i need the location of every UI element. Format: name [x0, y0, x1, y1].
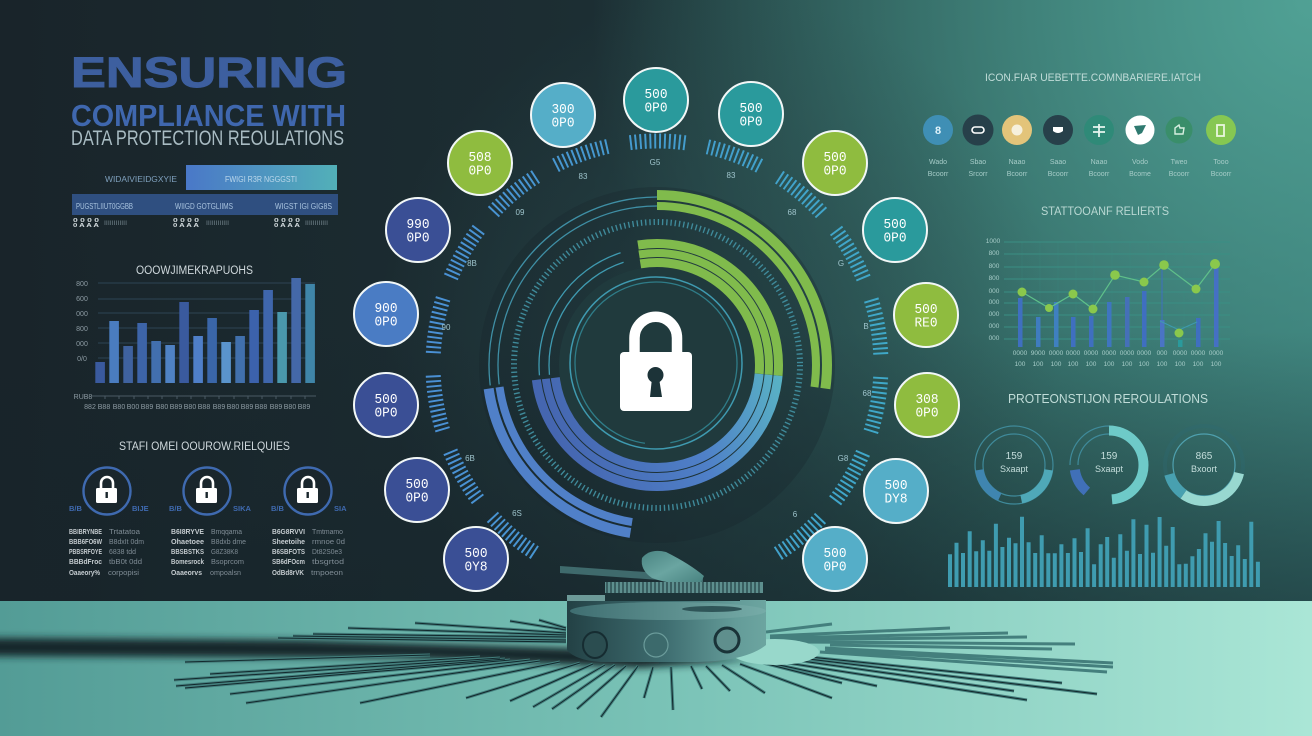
- panel: lock column 3: SIA: [334, 504, 347, 513]
- small tick labels: 09: [516, 208, 525, 217]
- bar chart: B89: [213, 404, 225, 411]
- panel: lock column 1: BBIBRYNBE: [69, 529, 102, 536]
- bar chart: B88: [198, 404, 210, 411]
- value circle 7: [895, 373, 959, 437]
- icon row labels: Bcoorr: [1211, 171, 1232, 178]
- icon row labels: Bcome: [1129, 171, 1151, 178]
- combo bar and line chart: 800: [989, 263, 1000, 270]
- combo bar and line chart: 0000: [1120, 350, 1135, 357]
- combo bar and line chart: 9000: [1031, 350, 1046, 357]
- panel: status table: WIIGD GOTGLIIMS: [175, 202, 233, 211]
- panel: lock column 1: tbB0t 0dd: [109, 559, 142, 566]
- panel: lock column 1: [69, 468, 149, 577]
- donut 3: Bxoort: [1191, 464, 1218, 474]
- panel: lock column 3: Sheetoihe: [272, 539, 305, 546]
- bar chart: 000: [76, 341, 88, 348]
- panel: lock column 1: Oaaeory%: [69, 570, 101, 577]
- value circle 4: 0P0: [824, 164, 846, 180]
- panel: lock column 3: OdBd8rVK: [272, 570, 304, 577]
- value circle 13: [354, 282, 418, 346]
- panel: lock column 2: Bomesrock: [171, 559, 204, 566]
- bar chart: B00: [127, 404, 139, 411]
- icon row labels: [928, 159, 1232, 178]
- value circle 14: [386, 198, 450, 262]
- panel: lock column 3: B/B: [271, 504, 284, 513]
- heading: combo chart: STATTOOANF RELIERTS: [1041, 204, 1169, 218]
- combo bar and line chart: 000: [989, 335, 1000, 342]
- combo bar and line chart: 100: [1193, 361, 1204, 368]
- bar chart: B89: [270, 404, 282, 411]
- value circle 6: RE0: [914, 316, 938, 332]
- panel: status table: WIDAIVIEIDGXYIE: [105, 174, 177, 184]
- icon row labels: Bcoorr: [1048, 171, 1069, 178]
- value circle 4: 500: [824, 150, 846, 166]
- bar chart: B88: [98, 404, 110, 411]
- combo bar and line chart: 100: [1033, 361, 1044, 368]
- icon row labels: Saao: [1050, 159, 1066, 166]
- small tick labels: G: [838, 259, 844, 268]
- panel: status table: 0 0 0 0: [173, 218, 199, 224]
- value circle 10: 500: [464, 546, 488, 562]
- panel: lock column 1: PBBSRFOYE: [69, 549, 102, 556]
- small tick labels: 68: [788, 208, 797, 217]
- outer blue arcs: [462, 170, 852, 560]
- value circle 13: 0P0: [374, 314, 398, 330]
- panel: lock column 3: Dt82S0e3: [312, 549, 342, 556]
- dotted tick ring: [514, 222, 800, 508]
- value circle 7: 0P0: [916, 406, 938, 422]
- small tick labels: 90: [442, 323, 451, 332]
- value circle 15: 508: [468, 150, 492, 166]
- value circle 9: 0P0: [824, 560, 846, 576]
- panel: lock column 1: corpopisi: [108, 570, 139, 577]
- value circle 7: 308: [916, 392, 938, 408]
- bar chart: B89: [241, 404, 253, 411]
- value circle 1: 0P0: [552, 116, 574, 132]
- value circle 14: 0P0: [406, 230, 430, 246]
- small tick labels: B: [863, 322, 869, 331]
- inner green arcs: [518, 226, 796, 504]
- floor shadow: [0, 638, 760, 668]
- panel: lock column 3: tbsgrtod: [312, 559, 344, 566]
- gauge backdrop disc: [479, 187, 835, 543]
- value circle 2: 0P0: [644, 100, 668, 116]
- icon 7: [1166, 116, 1192, 144]
- panel: lock column 1: BBBdFroc: [69, 559, 102, 566]
- combo bar and line chart: 000: [1157, 350, 1168, 357]
- combo bar and line chart: 100: [1015, 361, 1026, 368]
- combo bar and line chart: 000: [989, 323, 1000, 330]
- bar chart: 0/0: [77, 356, 87, 363]
- value circle 3: 500: [740, 101, 762, 117]
- panel: lock column 2: Ohaetoee: [171, 539, 204, 546]
- bar chart: B89: [298, 404, 310, 411]
- value circle 15: [448, 131, 512, 195]
- central radial gauge: [462, 170, 852, 560]
- bar chart: 600: [76, 296, 88, 303]
- panel: lock column 1: Trtatatoa: [109, 529, 140, 536]
- heading: left bar chart: OOOWJIMEKRAPUOHS: [136, 265, 253, 277]
- icon row labels: Naao: [1009, 159, 1025, 166]
- device on the floor: [560, 551, 819, 665]
- panel: status table: [72, 165, 338, 229]
- small tick labels: G8: [838, 454, 849, 463]
- panel: lock column 2: B8dxb dme: [211, 539, 246, 546]
- heading: donut section: PROTEONSTIJON REROULATIONS: [1008, 392, 1208, 406]
- combo bar and line chart: 0000: [1173, 350, 1188, 357]
- combo bar and line chart: 0000: [1066, 350, 1081, 357]
- combo bar and line chart: 000: [989, 288, 1000, 295]
- small tick labels: 83: [579, 172, 588, 181]
- panel: lock column 3: rmnoe 0d: [312, 539, 345, 546]
- panel: lock column 2: ompoalsn: [210, 570, 241, 577]
- inner teal to blue arcs: [536, 244, 778, 486]
- combo bar and line chart: 000: [989, 299, 1000, 306]
- radial floor rays: [174, 620, 1113, 717]
- combo bar and line chart: 000: [989, 311, 1000, 318]
- value circle 11: 0P0: [406, 490, 428, 506]
- panel: lock column 1: BBB6FO6W: [69, 539, 102, 546]
- panel: status table: FWIGI R3R NGGGSTI: [225, 174, 297, 184]
- icon 6: [1126, 116, 1154, 144]
- panel: lock column 2: B/B: [169, 504, 182, 513]
- heading: icon row: ICON.FIAR UEBETTE.COMNBARIERE.IATCH: [985, 72, 1201, 84]
- value circle 11: 500: [406, 477, 428, 493]
- panel: lock column 2: Bsoprcom: [211, 559, 244, 566]
- panel: lock column 3: B6G8RVVI: [272, 529, 305, 536]
- thin outer arcs: [470, 178, 844, 552]
- panel: status table: 0 0 0 0: [274, 218, 300, 224]
- value circle 1: 300: [552, 102, 574, 118]
- bar chart: B80: [284, 404, 296, 411]
- value circle 8: [864, 459, 928, 523]
- icon row labels: Srcorr: [968, 171, 988, 178]
- panel: lock column 2: B6I8RYVE: [171, 529, 204, 536]
- combo bar and line chart: 100: [1139, 361, 1150, 368]
- combo bar and line chart: 100: [1051, 361, 1062, 368]
- icon row labels: Bcoorr: [1007, 171, 1028, 178]
- icon 4: [1043, 115, 1073, 145]
- small tick labels: 8B: [467, 259, 477, 268]
- panel: status table: PUGSTLIIUT0GGBB: [76, 202, 133, 211]
- panel: lock column 1: BIJE: [132, 504, 149, 513]
- value circle 8: 500: [884, 478, 908, 494]
- panel: status table: 0 A A A: [173, 223, 200, 229]
- donut 3: 865: [1196, 451, 1213, 462]
- small tick labels: 6S: [512, 509, 522, 518]
- donut 2: 159: [1101, 451, 1118, 462]
- combo bar and line chart: 100: [1086, 361, 1097, 368]
- panel: lock column 3: tmpoeon: [311, 570, 343, 577]
- panel: status table: IIIIIIIIIIII: [206, 221, 229, 227]
- icon 3: [1002, 115, 1032, 145]
- value circle 3: 0P0: [740, 114, 762, 130]
- small tick labels: 83: [727, 171, 736, 180]
- panel: status table: 0 0 0 0: [73, 218, 99, 224]
- icon 8: [1206, 115, 1236, 145]
- value circle 6: [894, 283, 958, 347]
- combo bar and line chart: [986, 238, 1230, 368]
- value circle 5: 500: [884, 217, 906, 233]
- combo bar and line chart: 0000: [1137, 350, 1152, 357]
- donut 1: Sxaapt: [1000, 464, 1029, 474]
- value circle 1: [531, 83, 595, 147]
- bar chart: [74, 278, 316, 411]
- panel: status table: WIGST IGI GIG8S: [275, 202, 332, 211]
- value circle 3: [719, 82, 783, 146]
- title: COMPLIANCE WITH: [71, 98, 346, 133]
- value circle 9: 500: [824, 546, 846, 562]
- value circle 9: [803, 527, 867, 591]
- small tick labels: 6B: [465, 454, 475, 463]
- donut 1: 159: [1006, 451, 1023, 462]
- panel: lock column 2: SIKA: [233, 504, 252, 513]
- value circle 13: 900: [374, 301, 398, 317]
- panel: lock column 2: Bmqqama: [211, 529, 242, 536]
- combo bar and line chart: 800: [989, 275, 1000, 282]
- panel: status table: IIIIIIIIIIII: [305, 221, 328, 227]
- value circle 8: DY8: [884, 492, 908, 508]
- panel: lock column 1: B8dxIt 0dm: [109, 539, 144, 546]
- value circle 6: 500: [914, 302, 938, 318]
- title: DATA PROTECTION REOULATIONS: [71, 127, 344, 150]
- combo bar and line chart: 0000: [1084, 350, 1099, 357]
- bar chart: 882: [84, 404, 96, 411]
- panel: lock column 2: BBSBSTKS: [171, 549, 204, 556]
- value circle 10: [444, 527, 508, 591]
- bar chart: B80: [184, 404, 196, 411]
- panel: lock column 2: G8Z38K8: [211, 549, 238, 556]
- panel: lock column 3: SB6dFOcm: [272, 559, 305, 566]
- donut 1: [968, 419, 1060, 511]
- value circle 14: 990: [406, 217, 430, 233]
- bar chart: RUB8: [74, 394, 92, 401]
- combo bar and line chart: 800: [989, 250, 1000, 257]
- panel: lock column 3: B6SBFOTS: [272, 549, 305, 556]
- tick arcs between value circles: [433, 141, 881, 589]
- title: ENSURING: [71, 49, 347, 97]
- combo bar and line chart: 100: [1122, 361, 1133, 368]
- icon row labels: Sbao: [970, 159, 986, 166]
- panel: lock column 2: [169, 468, 252, 577]
- inner disc: [559, 267, 755, 463]
- panel: status table: 0 A A A: [73, 223, 100, 229]
- combo bar and line chart: 100: [1175, 361, 1186, 368]
- small tick labels: G5: [650, 158, 661, 167]
- icon row: [923, 114, 1236, 146]
- value circle 11: [385, 458, 449, 522]
- panel: lock column 3: [271, 468, 347, 577]
- combo bar and line chart: 100: [1104, 361, 1115, 368]
- value circle 5: 0P0: [884, 230, 906, 246]
- combo bar and line chart: 0000: [1191, 350, 1206, 357]
- panel: lock column 1: B/B: [69, 504, 82, 513]
- value circle 12: 0P0: [374, 406, 398, 422]
- bar chart: B89: [170, 404, 182, 411]
- donut 2: [1060, 416, 1158, 514]
- small tick labels: 68: [863, 389, 872, 398]
- bar chart: B89: [141, 404, 153, 411]
- bar chart: B80: [156, 404, 168, 411]
- small tick labels: [442, 158, 872, 519]
- combo bar and line chart: 0000: [1013, 350, 1028, 357]
- icon 5: [1084, 115, 1114, 145]
- small tick labels: 6: [793, 510, 798, 519]
- bar chart: B80: [113, 404, 125, 411]
- bottom right bar strip: [950, 517, 1258, 587]
- value circle 12: [354, 373, 418, 437]
- heading: lock section: STAFI OMEI OOUROW.RIELQUIES: [119, 439, 290, 453]
- value circle 10: 0Y8: [464, 560, 488, 576]
- panel: lock column 2: Oaaeorvs: [171, 570, 202, 577]
- combo bar and line chart: 100: [1211, 361, 1222, 368]
- value circle 12: 500: [374, 392, 398, 408]
- combo bar and line chart: 0000: [1102, 350, 1117, 357]
- bar chart: 800: [76, 281, 88, 288]
- panel: status table: IIIIIIIIIIII: [104, 221, 127, 227]
- panel: lock column 1: 6838 tdd: [109, 549, 136, 556]
- icon row labels: Vodo: [1132, 159, 1148, 166]
- combo bar and line chart: 0000: [1049, 350, 1064, 357]
- bar chart: 000: [76, 311, 88, 318]
- value circle 4: [803, 131, 867, 195]
- combo bar and line chart: 100: [1157, 361, 1168, 368]
- combo bar and line chart: 0000: [1209, 350, 1224, 357]
- icon row labels: Naao: [1091, 159, 1107, 166]
- floor: [0, 601, 1312, 736]
- icon row labels: Tweo: [1171, 159, 1187, 166]
- value circle 15: 0P0: [468, 164, 492, 180]
- icon row labels: Tooo: [1213, 159, 1229, 166]
- icon 1: [923, 115, 953, 145]
- value circle 5: [863, 198, 927, 262]
- outer green arcs: [487, 195, 827, 535]
- combo bar and line chart: 100: [1068, 361, 1079, 368]
- value circle 2: 500: [644, 87, 668, 103]
- bar chart: B88: [255, 404, 267, 411]
- donut 2: Sxaapt: [1095, 464, 1124, 474]
- icon row labels: Bcoorr: [928, 171, 949, 178]
- icon: central padlock: [620, 317, 692, 411]
- icon 2: [962, 114, 994, 146]
- value circle 2: [624, 68, 688, 132]
- icon row labels: Bcoorr: [1089, 171, 1110, 178]
- icon 1: 8: [935, 125, 941, 137]
- thin inner arcs: [529, 237, 785, 493]
- icon row labels: Bcoorr: [1169, 171, 1190, 178]
- icon row labels: Wado: [929, 159, 947, 166]
- value circles ring: [354, 68, 959, 591]
- panel: lock column 3: Tmtmamo: [312, 529, 343, 536]
- bar chart: 800: [76, 326, 88, 333]
- title: [71, 49, 347, 150]
- panel: status table: 0 A A A: [274, 223, 301, 229]
- combo bar and line chart: 1000: [986, 238, 1001, 245]
- bar chart: B80: [227, 404, 239, 411]
- donut 3: [1154, 415, 1254, 515]
